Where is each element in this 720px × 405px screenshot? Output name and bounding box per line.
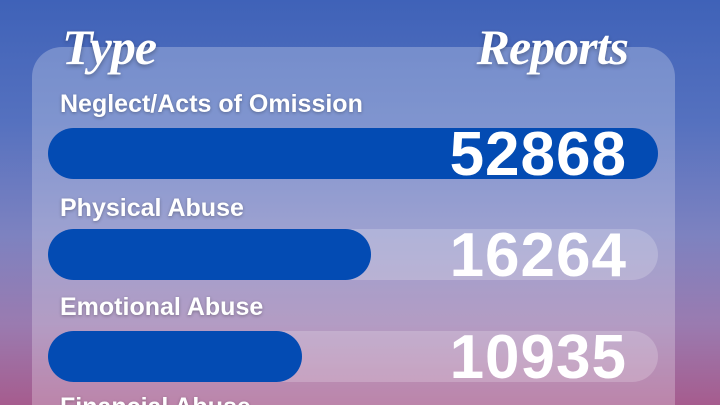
number: 10935: 10935 <box>450 323 627 392</box>
label: neglect: Neglect/Acts of Omission <box>60 90 363 118</box>
bar: physical <box>48 229 371 280</box>
number: 16264: 16264 <box>450 221 627 290</box>
bar: neglect <box>48 128 658 179</box>
bar: emotional <box>48 331 302 382</box>
track: emotional <box>48 331 658 382</box>
panel: chart card <box>32 47 675 405</box>
heading: Reports: Reports <box>477 19 628 75</box>
heading: Type: Type <box>62 19 156 75</box>
label: physical: Physical Abuse <box>60 194 244 222</box>
number: 52868: 52868 <box>450 120 627 189</box>
label: emotional: Emotional Abuse <box>60 293 263 321</box>
track: physical <box>48 229 658 280</box>
